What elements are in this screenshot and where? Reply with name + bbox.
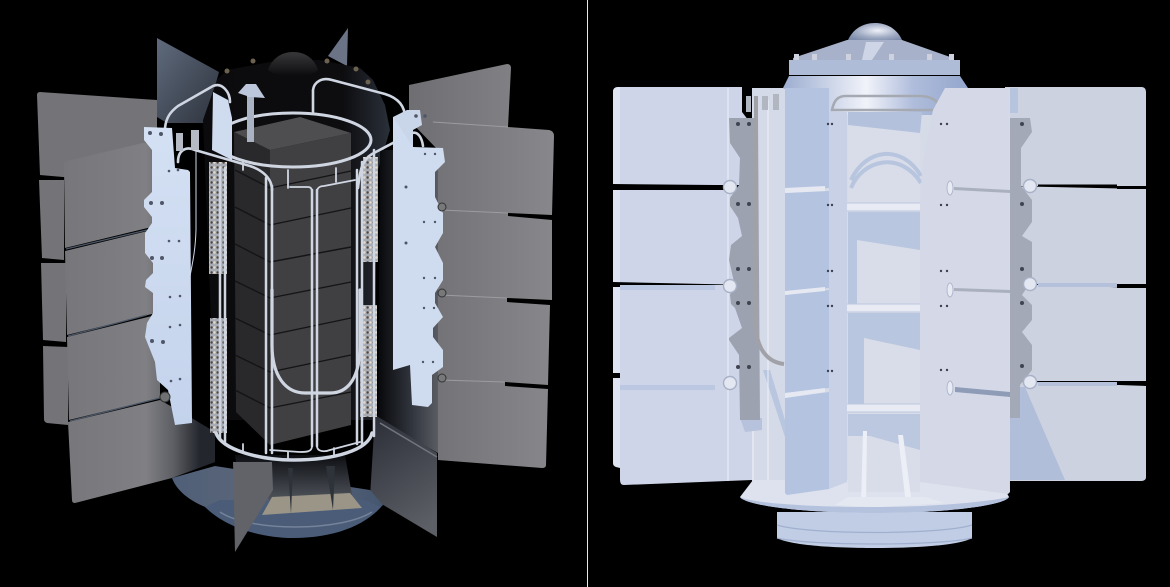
channel shadow 2 bbox=[848, 212, 920, 305]
side lugs bbox=[724, 180, 1036, 390]
tan plate bbox=[262, 493, 362, 515]
right fin bolt pairs bbox=[940, 123, 948, 371]
right fin black notches bbox=[1038, 184, 1146, 385]
right fin lower gap bbox=[955, 387, 1010, 397]
collar body bbox=[783, 76, 968, 115]
hull seam lines bbox=[728, 88, 768, 481]
right bead strip upper bbox=[363, 157, 378, 262]
central channel bbox=[848, 112, 920, 492]
vertical struts bbox=[220, 150, 374, 453]
dome bbox=[268, 52, 318, 76]
bottom centre fin bbox=[233, 462, 273, 552]
channel ribs bbox=[861, 431, 912, 505]
left white bracket bbox=[144, 127, 192, 425]
base flange shadow edge bbox=[740, 497, 1009, 513]
dark upper body bbox=[203, 60, 390, 420]
back fin: upper left blue-grey bbox=[157, 38, 219, 123]
left connectors bbox=[176, 130, 199, 151]
stack right face bbox=[270, 133, 351, 445]
left bracket shadow bbox=[740, 418, 762, 432]
channel shadow 3 bbox=[848, 313, 920, 405]
right solar fin: one sheet with notches bbox=[409, 64, 554, 468]
right white bracket bbox=[393, 117, 445, 407]
left front solar fin rows bbox=[64, 143, 215, 503]
dome bbox=[848, 23, 902, 40]
right fin strips bbox=[1038, 283, 1117, 386]
battery stack bbox=[234, 117, 351, 445]
right inner dark fin bbox=[378, 150, 438, 453]
stack left face bbox=[234, 132, 270, 445]
right solar fin rows bbox=[1005, 87, 1146, 481]
right fin top shadow bbox=[1010, 88, 1018, 113]
left fin gaps bbox=[785, 186, 825, 398]
right fin body bbox=[920, 88, 1010, 494]
base plate bbox=[835, 497, 945, 507]
base ledge lines bbox=[220, 512, 372, 527]
lower right fin crease bbox=[380, 423, 437, 457]
right front arch bbox=[358, 133, 423, 188]
left fin outer panel rows bbox=[785, 88, 829, 191]
pipe connectors bbox=[746, 94, 779, 112]
left bead strip upper bbox=[209, 162, 227, 274]
lower ring bbox=[777, 512, 972, 548]
left bracket holes bbox=[736, 122, 751, 369]
right grey bracket bbox=[1010, 118, 1032, 418]
central hull bbox=[785, 88, 1010, 481]
bottom ring bbox=[216, 433, 372, 460]
panel divider bbox=[587, 0, 588, 587]
base lower ring bbox=[205, 500, 381, 538]
left grey bracket bbox=[729, 118, 760, 420]
inner rails bbox=[270, 180, 360, 452]
left back solar fin rows bbox=[37, 92, 157, 425]
left bead strip lower bbox=[210, 318, 227, 433]
top handle bbox=[832, 96, 942, 110]
flange bolts bbox=[794, 54, 954, 60]
cone ribs bbox=[862, 42, 884, 60]
channel shadow 1 bbox=[848, 112, 922, 133]
left solar fin rows bbox=[613, 87, 752, 485]
flange bolts bbox=[224, 58, 370, 84]
channel arc shadow bbox=[851, 154, 921, 188]
hull shadow diagonal bbox=[763, 370, 785, 437]
stack module seams bbox=[235, 170, 351, 408]
left bracket lug bbox=[160, 392, 170, 402]
top ring bbox=[215, 113, 371, 167]
right fin lugs bbox=[438, 203, 446, 382]
left front fin bbox=[785, 88, 847, 495]
shelves bbox=[845, 203, 925, 412]
top connector post bbox=[238, 84, 265, 142]
left fin bolt pairs bbox=[827, 123, 833, 372]
right front fin bbox=[920, 88, 1010, 494]
big U loop bbox=[272, 290, 360, 393]
lower ties bbox=[243, 444, 334, 460]
base flange bbox=[740, 480, 1009, 513]
right fin gaps bbox=[954, 187, 1010, 293]
base flange bbox=[172, 466, 383, 522]
right back bracket bbox=[393, 110, 422, 150]
left fin inner panel bbox=[829, 112, 847, 489]
upper ties bbox=[243, 160, 336, 188]
left hull bbox=[752, 88, 788, 481]
left thin cable bbox=[188, 150, 196, 290]
silver pipe bbox=[756, 96, 784, 364]
channel shadow 4 bbox=[848, 414, 920, 450]
right fin cast shadow bbox=[1010, 387, 1065, 480]
lower right fin bbox=[370, 415, 437, 537]
right bracket holes bbox=[404, 114, 436, 363]
panel: exterior view bbox=[613, 23, 1146, 548]
left fin gap lines bbox=[66, 230, 160, 421]
left bracket holes bbox=[148, 131, 181, 382]
base ribs bbox=[288, 466, 335, 514]
left rear arch bbox=[165, 85, 230, 165]
right fin lugs bbox=[947, 181, 953, 395]
centre column bbox=[235, 455, 352, 500]
left front arch bbox=[178, 148, 272, 190]
stack top face bbox=[234, 117, 351, 150]
panel: cutaway view bbox=[37, 28, 554, 552]
right fin seam lines bbox=[433, 122, 508, 382]
right bead strip lower bbox=[360, 305, 377, 417]
flange bbox=[789, 60, 960, 75]
right bracket holes bbox=[1020, 122, 1024, 368]
right rear arch bbox=[313, 79, 405, 290]
dome cone bbox=[793, 40, 953, 60]
left fin edge band bbox=[613, 87, 620, 468]
left rear bracket bbox=[212, 92, 232, 160]
tube frame bbox=[165, 79, 423, 460]
left fin strips bbox=[620, 285, 715, 390]
back fin: upper right blue-grey bbox=[328, 28, 348, 66]
ring ledge lines bbox=[777, 525, 972, 544]
